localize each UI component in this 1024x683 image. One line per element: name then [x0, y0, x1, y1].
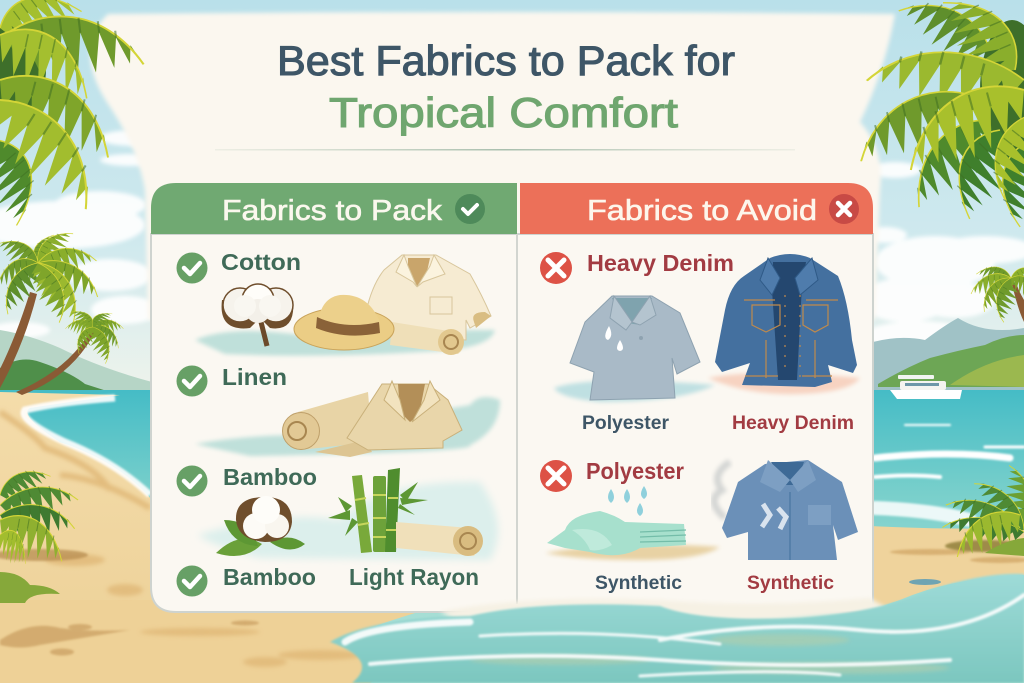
water smear [195, 397, 500, 456]
pink water stain [708, 373, 860, 394]
title [277, 37, 735, 136]
sky [0, 0, 1024, 400]
right sand marks [890, 549, 1024, 563]
water smear [195, 330, 495, 356]
foam over panel [440, 598, 890, 625]
right mountains [873, 318, 1024, 390]
wet sand bands [0, 412, 150, 508]
header: fabrics to avoid: Fabrics to Avoid [587, 195, 817, 227]
panel: comparison table [151, 183, 873, 612]
low shrub [985, 538, 1024, 556]
fronds [65, 305, 124, 364]
sand streaks [45, 554, 362, 667]
fronds [0, 223, 103, 324]
cream shirt [366, 255, 491, 340]
polo shirt [570, 296, 700, 400]
foam lines [345, 595, 1024, 676]
clouds [0, 130, 1024, 349]
label: Polyester [586, 458, 684, 484]
shoreline foam [24, 398, 150, 495]
title line 1: Best Fabrics to Pack for [277, 37, 735, 84]
water body [330, 574, 1024, 683]
crown shade [0, 25, 46, 115]
check icon [176, 366, 208, 396]
right sand strip [870, 526, 1024, 610]
cream title backdrop [90, 12, 895, 320]
palm: top left [0, 0, 144, 228]
label: synthetic red: Synthetic [747, 573, 834, 594]
bamboo stalks [328, 468, 428, 553]
cross icon [540, 460, 572, 492]
rolled fabric [396, 522, 483, 556]
bush: lower left [0, 458, 88, 603]
puddle [909, 579, 941, 585]
sand bottom left [0, 600, 460, 683]
bush: lower right [942, 465, 1024, 560]
low shrub [0, 572, 60, 603]
label: light rayon: Light Rayon [349, 564, 479, 590]
linen shirt [347, 381, 462, 450]
cross icon [540, 252, 572, 284]
trunk [16, 330, 95, 395]
water under polo [554, 381, 715, 402]
cotton boll [222, 284, 293, 346]
sea [0, 390, 1024, 683]
center divider [516, 234, 518, 604]
shadow [945, 540, 1024, 552]
check icon [176, 252, 208, 284]
palm: mid left [0, 223, 103, 388]
palm: top right [850, 0, 1024, 229]
label: Cotton [221, 249, 301, 275]
crown shade [980, 20, 1024, 160]
row: polyester [540, 458, 858, 594]
left beach [0, 392, 152, 683]
row: cotton [176, 249, 495, 356]
right hill highlight [950, 355, 1024, 387]
label: bamboo: Bamboo [223, 564, 316, 590]
denim jacket [715, 254, 857, 387]
label: heavy denim: Heavy Denim [732, 413, 854, 434]
check icon [176, 566, 208, 596]
fronds [971, 259, 1024, 323]
straw hat [294, 295, 394, 350]
smoke [714, 462, 730, 518]
folded towel [547, 511, 686, 555]
sand shadow [545, 545, 720, 560]
palm: small left [16, 305, 124, 395]
trunk [1012, 282, 1024, 322]
row: bamboo [176, 464, 498, 560]
title divider [215, 149, 795, 150]
left island greenery [0, 360, 110, 396]
label: Heavy Denim [587, 250, 734, 276]
rolled fabric [390, 322, 464, 355]
row: heavy denim [540, 250, 860, 434]
row: bamboo and light rayon [176, 564, 479, 596]
water drops [608, 486, 647, 516]
header: fabrics to pack: Fabrics to Pack [222, 195, 443, 227]
header: fabrics to avoid [520, 183, 873, 234]
header: fabrics to pack [151, 183, 517, 234]
cotton with leaves [216, 496, 305, 556]
shadow [0, 549, 88, 561]
trunk [0, 292, 37, 388]
panel body [151, 234, 873, 612]
right sea foam [875, 425, 1024, 520]
olive shallows [470, 634, 950, 674]
check icon [176, 466, 208, 496]
blue shirt [722, 460, 858, 560]
sand patches [0, 620, 259, 656]
label: Bamboo [223, 464, 317, 490]
label: synthetic: Synthetic [595, 573, 682, 594]
rolled fabric [282, 392, 372, 457]
palm: mid right [971, 259, 1024, 323]
title line 2: Tropical Comfort [329, 89, 678, 136]
foreground water [330, 574, 1024, 683]
water smear [198, 482, 498, 560]
row: linen [176, 364, 500, 457]
left mountains [0, 330, 152, 392]
label: Linen [222, 364, 287, 390]
label: polyester: Polyester [582, 413, 670, 434]
boat [890, 375, 962, 399]
right island greenery [878, 335, 1024, 387]
